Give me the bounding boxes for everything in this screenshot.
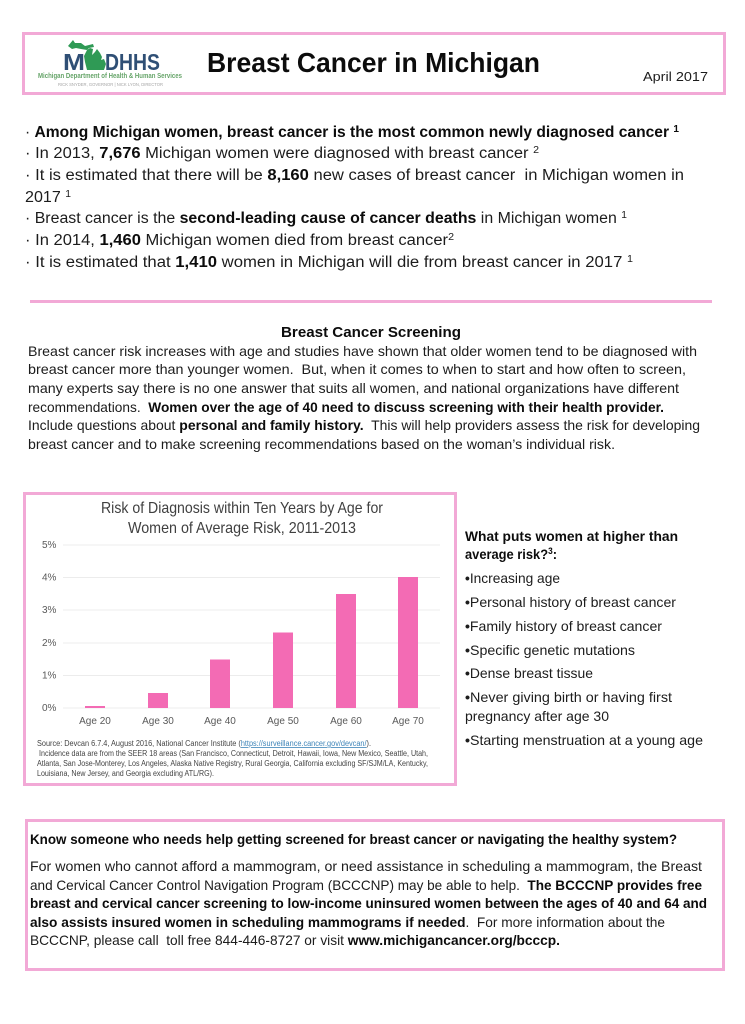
bar chart: 1%: [42, 670, 57, 682]
text block: key facts: · Breast cancer is the second-leading cause of cancer deaths in Michigan women: [25, 210, 613, 227]
chart source note: Atlanta, San Jose-Monterey, Los Angeles, Alaska Native Registry, Rural Georgia, California excluding SF/SJM/LA, Kentucky,: [37, 759, 428, 768]
bar chart: Age 60: [330, 716, 362, 727]
title: Breast Cancer in Michigan: [207, 47, 540, 78]
text block: key facts: 2: [533, 145, 539, 156]
risk factors list: •Dense breast tissue: [465, 665, 593, 681]
bar chart: 3%: [42, 605, 57, 616]
chart title: [101, 500, 384, 537]
bar chart: 5%: [42, 540, 57, 551]
logo: MDHHS: [38, 40, 182, 88]
risk factors heading: 3: [548, 546, 553, 556]
text block: key facts: [25, 124, 684, 271]
text block: risk factors: [465, 528, 703, 748]
bar chart: [42, 540, 440, 727]
risk factors list: •Personal history of breast cancer: [465, 594, 676, 610]
logo wordmark: M: [63, 49, 85, 75]
chart title: Risk of Diagnosis within Ten Years by Age for: [101, 500, 384, 517]
risk factors list: •Starting menstruation at a young age: [465, 732, 703, 748]
chart source note: Louisiana, New Jersey, and Georgia excluding ATL/RG).: [37, 769, 214, 778]
text block: screening paragraph: breast cancer more than younger women. But, when it comes to when to start and how often to screen,: [28, 361, 686, 377]
text block: screening paragraph: recommendations. Women over the age of 40 need to discuss screening with their health provider.: [28, 399, 664, 415]
chart title: Women of Average Risk, 2011-2013: [128, 520, 356, 537]
heading: screening: Breast Cancer Screening: [281, 324, 461, 341]
risk factors list: •Never giving birth or having first: [465, 689, 672, 705]
bar chart: Age 30: [142, 716, 174, 727]
risk factors heading: average risk?: [465, 546, 555, 562]
risk factors heading: What puts women at higher than: [465, 528, 678, 544]
risk factors heading: [465, 528, 678, 562]
chart source note: [37, 739, 428, 778]
text block: key facts: 2: [448, 232, 454, 243]
risk factors heading: :: [553, 546, 557, 562]
callout heading: Know someone who needs help getting screened for breast cancer or navigating the healthy system?: [30, 831, 677, 847]
callout body: [30, 858, 707, 948]
chart source note: Source: Devcan 6.7.4, August 2016, National Cancer Institute (https://surveillance.cancer.gov/devcan/).: [37, 739, 371, 748]
bar chart: Age 20: [79, 716, 111, 727]
callout body: also assists insured women in scheduling mammograms if needed. For more information about the: [30, 914, 665, 930]
risk factors list: pregnancy after age 30: [465, 708, 609, 724]
text block: screening paragraph: many experts say there is no one answer that suits all women, and national organizations have different: [28, 380, 679, 396]
bar chart: 4%: [42, 572, 57, 584]
text block: key facts: 1: [627, 254, 633, 265]
bar chart: 0%: [42, 703, 57, 714]
bar chart: 2%: [42, 638, 57, 649]
text block: key facts: · Among Michigan women, breast cancer is the most common newly diagnosed cancer: [25, 124, 665, 141]
risk factors list: •Specific genetic mutations: [465, 642, 635, 658]
callout body: BCCCNP, please call toll free 844-446-8727 or visit www.michigancancer.org/bcccp.: [30, 932, 560, 948]
text block: screening paragraph: [28, 343, 700, 452]
text block: screening paragraph: breast cancer and to make screening recommendations based on the woman’s individual risk.: [28, 436, 615, 452]
risk factors list: •Increasing age: [465, 570, 560, 586]
text block: key facts: · In 2014, 1,460 Michigan women died from breast cancer: [25, 232, 429, 249]
text block: key facts: 1: [65, 189, 71, 200]
text block: screening paragraph: Include questions about personal and family history. This will help providers assess the risk for developing: [28, 417, 700, 433]
panel: risk chart: [24, 494, 456, 784]
text block: key facts: · It is estimated that 1,410 women in Michigan will die from breast cancer in 2017: [25, 254, 594, 271]
text block: key facts: · In 2013, 7,676 Michigan women were diagnosed with breast cancer: [25, 145, 505, 162]
panel: screening help callout: [26, 820, 724, 970]
text block: screening paragraph: Breast cancer risk increases with age and studies have shown that older women tend to be diagnosed with: [28, 343, 697, 359]
icon: Michigan silhouette: [68, 40, 106, 70]
panel: header: [24, 34, 724, 94]
text block: key facts: 1: [673, 124, 679, 135]
date: April 2017: [643, 69, 708, 84]
chart source note: Incidence data are from the SEER 18 areas (San Francisco, Connecticut, Detroit, Hawaii, Iowa, New Mexico, Seattle, Utah,: [39, 749, 428, 758]
callout body: breast and cervical cancer screening to low-income uninsured women between the ages of 40 and 64 and: [30, 895, 707, 911]
bar chart: Age 70: [392, 716, 424, 727]
bar chart: Age 50: [267, 716, 299, 727]
bar chart: Age 40: [204, 716, 236, 727]
logo wordmark letters: DHHS: [105, 49, 160, 75]
text block: key facts: 2017: [25, 189, 59, 206]
risk factors list: •Family history of breast cancer: [465, 618, 662, 634]
logo department name: Michigan Department of Health & Human Services: [38, 71, 182, 80]
logo officials line: RICK SNYDER, GOVERNOR | NICK LYON, DIRECTOR: [58, 82, 163, 88]
callout body: and Cervical Cancer Control Navigation Program (BCCCNP) may be able to help. The BCCCNP provides free: [30, 877, 702, 893]
callout body: For women who cannot afford a mammogram, or need assistance in scheduling a mammogram, the Breast: [30, 858, 702, 874]
risk factors list: [465, 570, 703, 748]
text block: key facts: · It is estimated that there will be 8,160 new cases of breast cancer in Michigan women in: [25, 167, 684, 184]
text block: key facts: 1: [621, 210, 627, 221]
